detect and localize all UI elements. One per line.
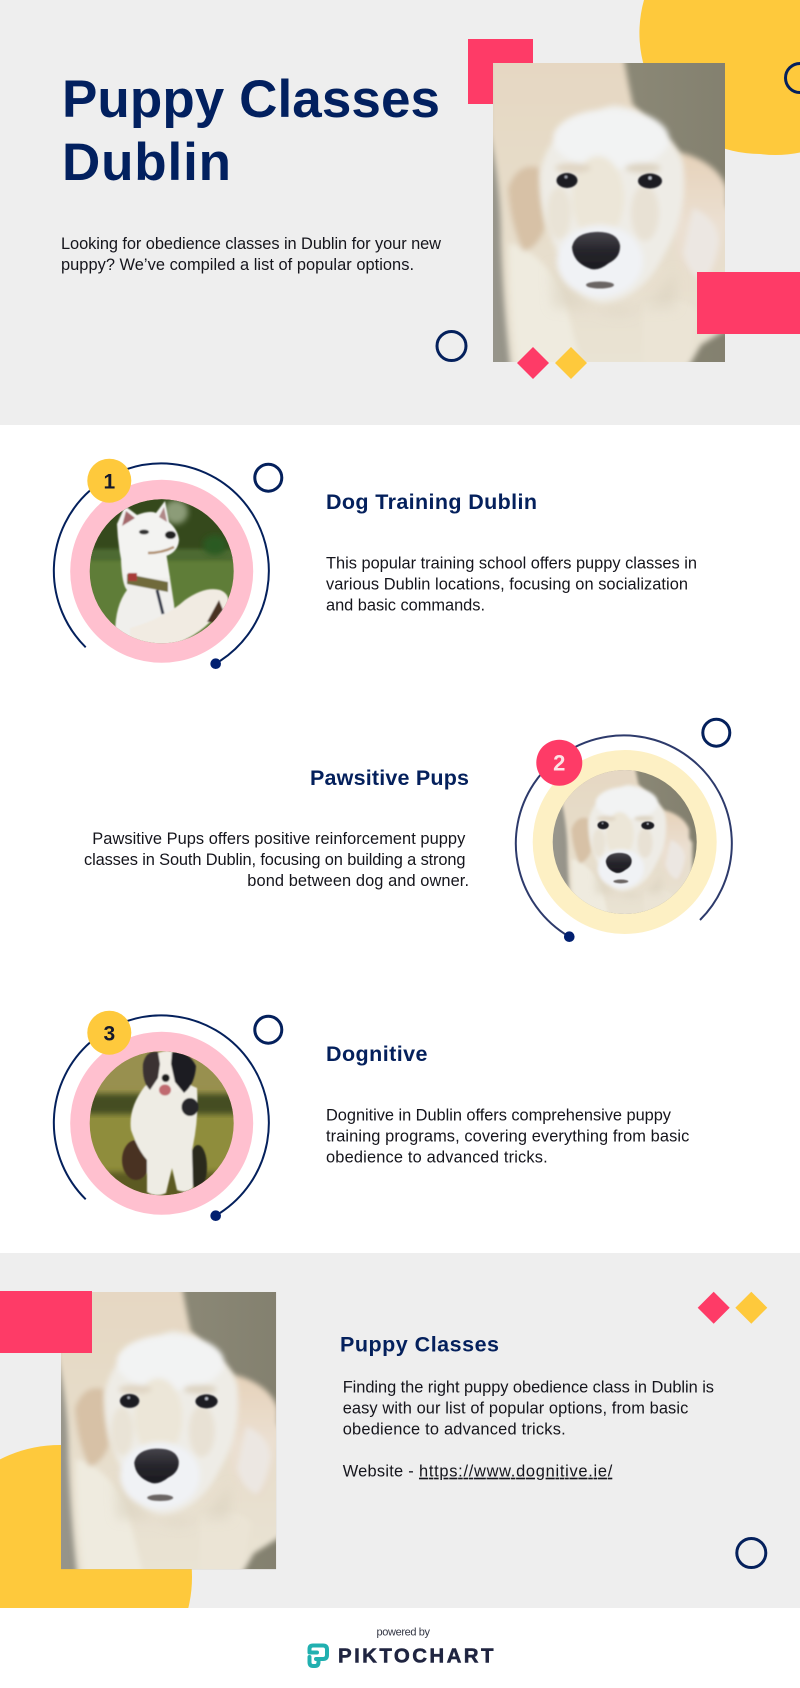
decoration: yellow diamond: [735, 1292, 767, 1324]
decoration: outlined circle: [703, 719, 730, 746]
decoration: outlined circle: [255, 1016, 282, 1043]
decoration: pink diamond: [517, 347, 549, 379]
decoration: yellow circle: [639, 0, 800, 155]
decoration: pink rectangle: [697, 272, 800, 334]
badge 3: [87, 1011, 131, 1055]
circular photo frame 1: [54, 459, 282, 669]
conclusion text: obedience to advanced tricks.: [343, 1420, 566, 1438]
decoration: pink diamond: [698, 1292, 730, 1324]
description 2: Pawsitive Pups offers positive reinforcement puppy: [92, 830, 466, 848]
decoration: outlined circle top right: [786, 64, 800, 92]
description 1: This popular training school offers puppy classes in: [326, 554, 697, 572]
description 3: [326, 1107, 689, 1167]
description 3: obedience to advanced tricks.: [326, 1149, 548, 1167]
title: Dublin: [62, 133, 231, 192]
icon: Piktochart mark: [310, 1646, 327, 1666]
intro text: puppy? We’ve compiled a list of popular options.: [61, 256, 414, 274]
photo: white puppy on grass: [90, 499, 234, 644]
decoration: outlined circle: [737, 1538, 766, 1568]
description 1: various Dublin locations, focusing on socialization: [326, 575, 688, 593]
intro text: [61, 235, 441, 274]
panel: class 3: [54, 1011, 689, 1221]
description 2: [84, 830, 469, 890]
decoration: outlined circle: [437, 332, 466, 360]
description 3: training programs, covering everything from basic: [326, 1128, 689, 1146]
badge 3: 3: [103, 1022, 115, 1046]
circular photo frame 3: [54, 1011, 282, 1221]
heading: Pawsitive Pups: Pawsitive Pups: [310, 766, 469, 790]
photo: white dog: [61, 1292, 276, 1570]
panel: class 1: [54, 459, 697, 669]
footer: Piktochart logo: [310, 1626, 494, 1667]
photo: white dog in circle: [552, 770, 697, 914]
conclusion text: https://www.dognitive.ie/: [419, 1463, 613, 1481]
description 2: bond between dog and owner.: [247, 872, 469, 890]
decoration: pink square: [468, 39, 533, 104]
badge 2: 2: [553, 750, 565, 776]
heading: Puppy Classes: Puppy Classes: [340, 1333, 499, 1357]
description 2: classes in South Dublin, focusing on building a strong: [84, 851, 466, 869]
conclusion text: [343, 1378, 714, 1481]
description 1: and basic commands.: [326, 596, 485, 614]
panel: class 2: [84, 719, 732, 945]
badge 1: 1: [103, 470, 115, 494]
intro text: Looking for obedience classes in Dublin for your new: [61, 235, 441, 253]
title: [62, 70, 440, 192]
decoration: yellow diamond: [555, 347, 587, 379]
decoration: pink rectangle: [0, 1291, 92, 1353]
heading: Dog Training Dublin: Dog Training Dublin: [326, 490, 537, 514]
description 1: [326, 554, 697, 614]
description 3: Dognitive in Dublin offers comprehensive puppy: [326, 1107, 672, 1125]
title: Puppy Classes: [62, 70, 440, 129]
photo: white dog: [493, 63, 725, 362]
circular photo frame 2: [516, 719, 732, 945]
wordmark: PIKTOCHART: [338, 1644, 494, 1667]
panel: header: [0, 0, 800, 425]
photo: collie in field: [90, 1051, 234, 1196]
heading: Dognitive: Dognitive: [326, 1042, 428, 1066]
badge 1: [87, 459, 131, 503]
powered by label: powered by: [377, 1626, 431, 1638]
decoration: outlined circle: [255, 464, 282, 491]
decoration: yellow circle: [0, 1445, 192, 1608]
conclusion text: Website -: [343, 1463, 414, 1481]
conclusion text: Finding the right puppy obedience class in Dublin is: [343, 1378, 714, 1396]
conclusion text: easy with our list of popular options, from basic: [343, 1399, 688, 1417]
panel: conclusion: [0, 1253, 800, 1608]
badge 2: [536, 740, 582, 786]
